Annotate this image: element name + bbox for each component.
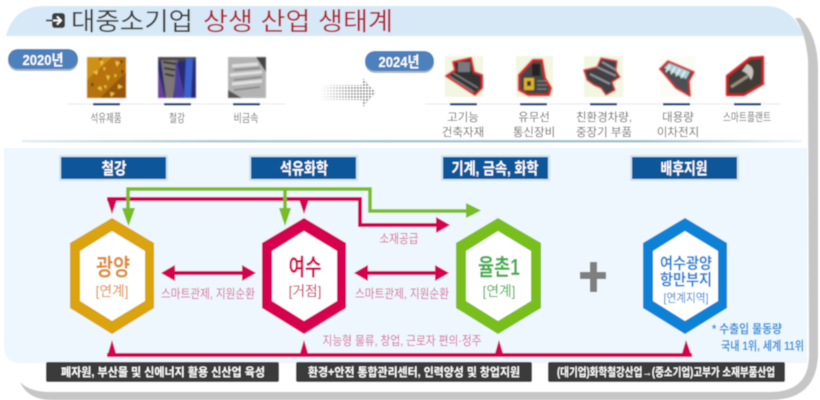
label: 친환경차량, 중장기 부품: 중장기 부품 xyxy=(576,126,632,139)
bar: 폐자원: 폐자원, 부산물 및 신에너지 활용 신산업 육성 xyxy=(61,365,265,379)
hexagon: 광양: [연계] xyxy=(96,283,128,299)
panel: 2024 xyxy=(365,51,780,139)
pill: 2020년: 2020년 xyxy=(22,52,64,69)
bar: 환경+안전 xyxy=(296,362,532,382)
label: 유무선 통신장비: 유무선 xyxy=(518,111,550,124)
header: 철강 xyxy=(59,155,168,181)
arrow: crimson material supply line xyxy=(107,199,450,233)
title text: 대중소기업 xyxy=(71,8,193,36)
header: 석유화학 xyxy=(249,155,358,181)
bar: 환경+안전: 환경+안전 통합관리센터, 인력양성 및 창업지원 xyxy=(308,365,520,379)
label: 친환경차량, 중장기 부품: 친환경차량, xyxy=(576,110,632,124)
arrow: green material supply line xyxy=(122,189,481,226)
title band xyxy=(6,6,804,36)
arrow: bottom support line xyxy=(107,340,692,357)
header: 기계, 금속, 화학 xyxy=(441,155,550,181)
icon: petroleum products xyxy=(87,57,126,98)
note: export and import ranking: 국내 1위, 세계 11위 xyxy=(721,339,804,353)
hexagon: 여수: [거점] xyxy=(288,283,322,299)
hexagon: 여수 xyxy=(262,218,346,334)
hexagon: 여수광양 항만부지: [연계지역] xyxy=(664,291,708,305)
label: 유무선 통신장비: 통신장비 xyxy=(513,126,555,139)
panel: ecosystem background xyxy=(4,148,807,363)
arrow: dotted transition xyxy=(320,77,376,108)
label: 철강: 철강 xyxy=(169,112,185,125)
label: 스마트관제, 지원순환 right: 스마트관제, 지원순환 xyxy=(355,287,449,301)
header: 기계, 금속, 화학: 기계, 금속, 화학 xyxy=(452,160,539,178)
hexagon: 율촌1: 율촌1 xyxy=(478,254,520,280)
label: 대용량 이차전지: 대용량 xyxy=(662,111,694,124)
label: 스마트플랜트: 스마트플랜트 xyxy=(723,111,771,124)
icon: smart plant xyxy=(727,57,763,95)
label: 석유제품: 석유제품 xyxy=(90,112,122,125)
hexagon: 광양: 광양 xyxy=(96,254,130,280)
title text highlighted: 상생 산업 생태계 xyxy=(203,8,393,36)
icon: non-ferrous metal xyxy=(228,57,266,98)
bar: 대기업 중소기업 xyxy=(548,362,785,382)
icon: steel xyxy=(158,57,196,98)
arrow: 광양-여수 two-way xyxy=(161,265,256,281)
icon: title arrow xyxy=(46,13,65,28)
label: 고기능 건축자재: 건축자재 xyxy=(442,126,484,139)
hexagon: 여수광양 항만부지: 여수광양 xyxy=(660,254,712,272)
label: 비금속: 비금속 xyxy=(234,112,258,125)
pill: 2024년: 2024년 xyxy=(378,54,420,71)
header: 철강: 철강 xyxy=(102,160,127,178)
header: 배후지원: 배후지원 xyxy=(660,160,708,178)
icon: large-capacity secondary battery xyxy=(660,56,696,97)
pill: 2024년 xyxy=(365,51,434,73)
hexagon: 율촌1 xyxy=(456,218,541,334)
label: 고기능 건축자재: 고기능 xyxy=(447,111,479,124)
hexagon: 여수: 여수 xyxy=(288,254,322,280)
hexagon: 광양 xyxy=(70,218,154,334)
hexagon: 여수광양 항만부지: 항만부지 xyxy=(660,271,712,289)
note: export and import ranking: * 수출입 물동량 xyxy=(712,322,782,336)
bar: 폐자원 xyxy=(46,362,279,382)
header: 배후지원 xyxy=(630,155,739,181)
icon: high-performance building materials xyxy=(445,56,483,97)
label: 소재공급: 소재공급 xyxy=(380,232,418,246)
panel: 2020 xyxy=(8,49,285,125)
label: 대용량 이차전지: 이차전지 xyxy=(657,126,699,139)
icon: wired and wireless communication equipment xyxy=(516,56,553,97)
hexagon: 여수광양 항만부지 xyxy=(643,218,727,334)
icon: eco-friendly vehicles and heavy equipment parts xyxy=(584,56,623,97)
bar: 대기업 중소기업: (대기업)화학철강산업→(중소기업)고부가 소재부품산업 xyxy=(557,365,775,379)
marker bars xyxy=(450,103,761,106)
label: 지능형 물류: 지능형 물류, 창업, 근로자 편의·정주 xyxy=(322,334,482,348)
marker bars xyxy=(93,103,260,106)
icon: plus xyxy=(580,262,606,292)
label: 스마트관제, 지원순환 left: 스마트관제, 지원순환 xyxy=(161,287,255,301)
arrow: 여수-율촌 two-way xyxy=(354,265,449,281)
header: 석유화학: 석유화학 xyxy=(280,160,328,178)
hexagon: 율촌1: [연계] xyxy=(482,283,516,299)
pill: 2020년 xyxy=(8,49,78,71)
